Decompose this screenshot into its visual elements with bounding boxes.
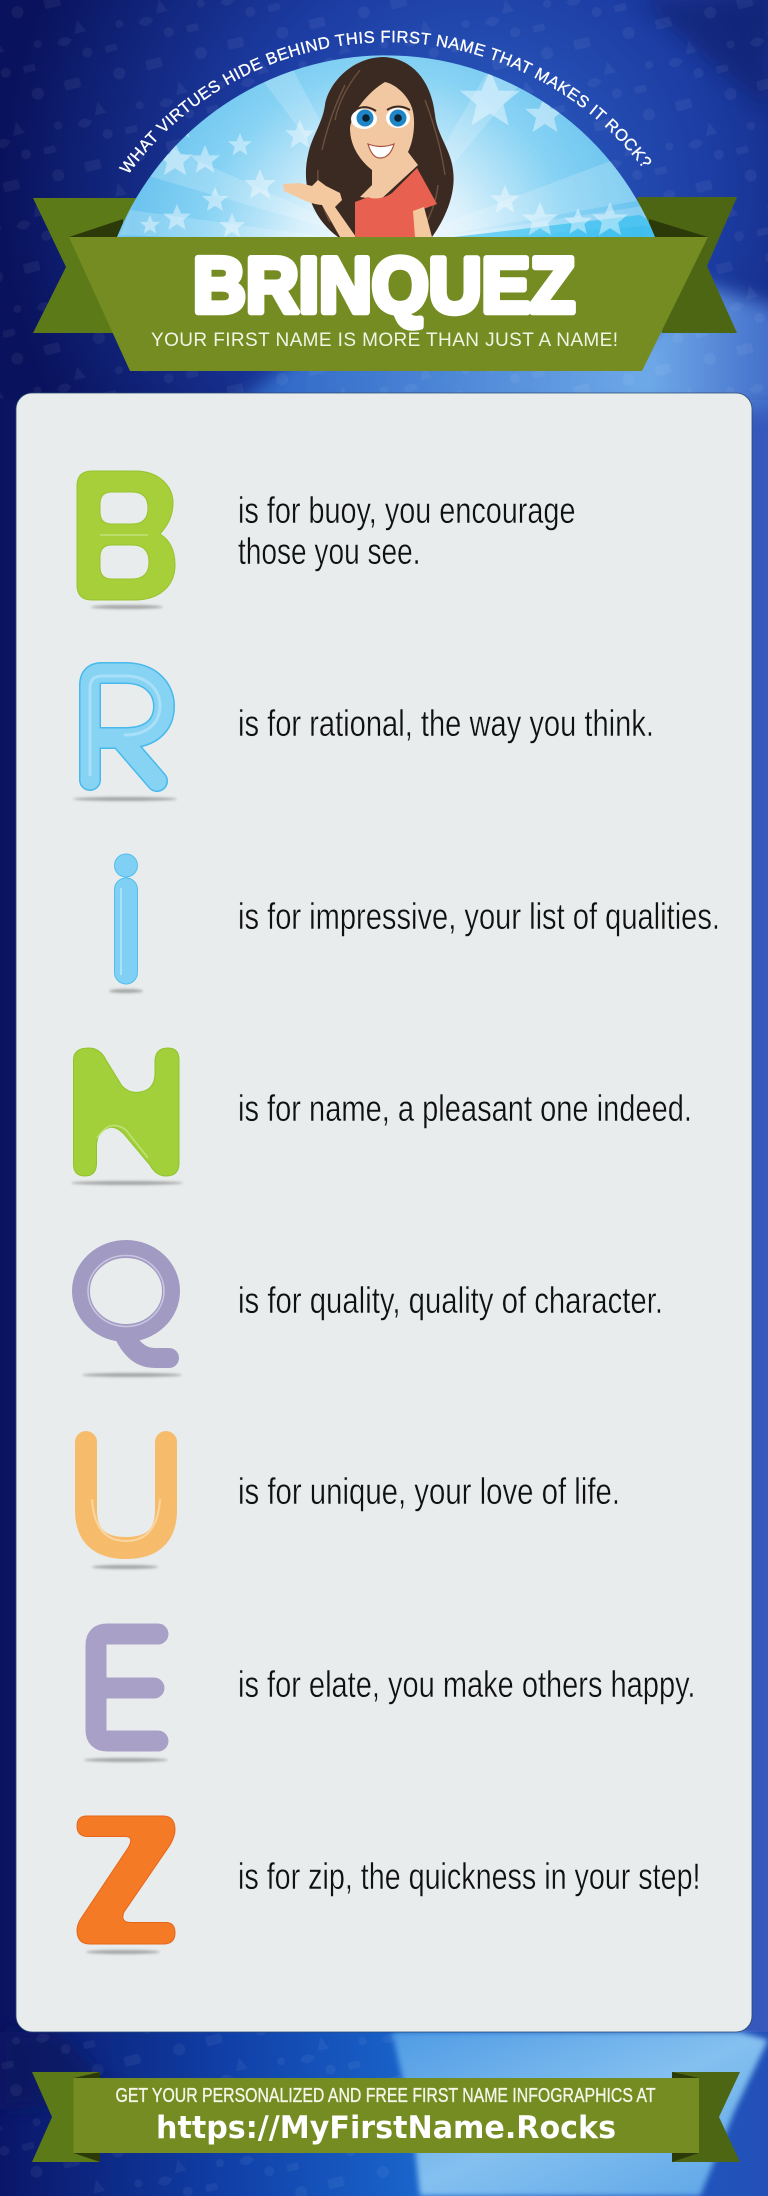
letter B row [77, 471, 576, 609]
banner body [74, 2078, 699, 2153]
character [283, 57, 454, 237]
letter U row [86, 1442, 620, 1569]
icon: letter E [84, 1634, 168, 1762]
footer banner [32, 2072, 740, 2162]
icon: letter Z [77, 1816, 175, 1954]
neck and face [350, 82, 418, 200]
icon: letter i [109, 854, 143, 993]
banner tails [32, 2072, 740, 2162]
letter i row [109, 854, 720, 993]
banner url: https://MyFirstName.Rocks [156, 2110, 616, 2146]
letter Q row [81, 1249, 663, 1377]
header badge [33, 30, 737, 371]
icon: letter R [73, 673, 177, 801]
mouth [368, 144, 394, 158]
icon: letter N [71, 1048, 183, 1185]
shirt [355, 168, 437, 237]
letter E row [84, 1634, 696, 1762]
name title: BRINQUEZ [193, 241, 575, 329]
panel: letters card [16, 393, 752, 2032]
arm and hand [283, 180, 356, 237]
letter R row [73, 673, 654, 801]
icon: letter U [86, 1442, 166, 1569]
icon: letter B [77, 471, 175, 609]
right arm [413, 207, 432, 237]
letter N row [71, 1048, 692, 1185]
subtitle: YOUR FIRST NAME IS MORE THAN JUST A NAME! [151, 330, 618, 351]
text: U: is for unique, your love of life. [238, 1470, 620, 1512]
burst dome with character [117, 55, 655, 237]
text: B: those you see. [238, 530, 420, 572]
hair [306, 57, 454, 237]
text: B [238, 489, 576, 572]
ribbon tails [33, 197, 737, 333]
letter Z row [77, 1816, 700, 1954]
icon: letter Q [81, 1249, 182, 1377]
curved question: WHAT VIRTUES HIDE BEHIND THIS FIRST NAME THAT MAKES IT ROCK? [118, 30, 652, 172]
text: Q: is for quality, quality of character. [238, 1279, 663, 1321]
eyes [350, 106, 410, 129]
ribbon [69, 237, 708, 371]
text: R: is for rational, the way you think. [238, 702, 654, 744]
text: B: is for buoy, you encourage [238, 489, 576, 531]
